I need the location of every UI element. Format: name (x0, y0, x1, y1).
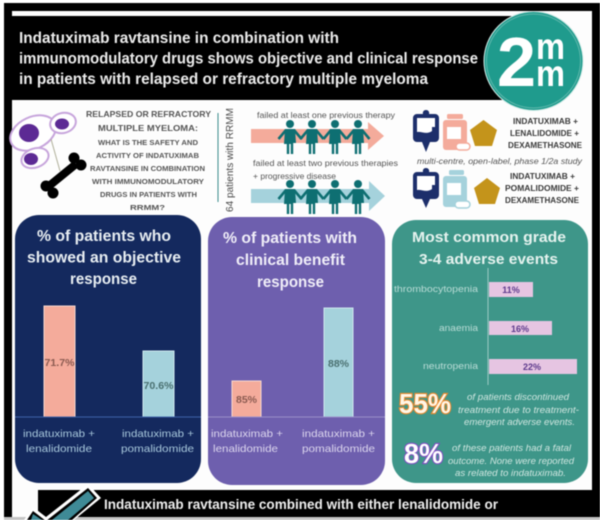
row: neutropenia 22%: 22% (523, 362, 541, 372)
drug combination 1 (508, 117, 583, 150)
stat text: fatal outcome: of these patients had a fatal (452, 443, 572, 453)
heading: objective response: response (70, 271, 137, 288)
stat text: fatal outcome: as related to indatuximab. (455, 468, 566, 478)
logo: 2 over m: m (536, 53, 565, 94)
bar: lenalidomide 71.7%: 71.7% (44, 358, 75, 369)
row: thrombocytopenia 11% (394, 282, 533, 297)
heading: objective response (27, 228, 181, 288)
drug combination 2: POMALIDOMIDE + (505, 184, 579, 193)
study design note: multi-centre, open-label, phase 1/2a study (417, 156, 583, 166)
question text: WHAT IS THE SAFETY AND (98, 138, 199, 147)
drug combination 1: INDATUXIMAB + (513, 117, 578, 126)
rotated label: 64 patients with RRMM: 64 patients with RRMM (225, 108, 236, 212)
conclusion text: Indatuximab ravtansine combined with either lenalidomide or (104, 496, 499, 512)
question text: WITH IMMUNOMODULATORY (92, 179, 204, 186)
axis labels: objective response: lenalidomide (26, 443, 92, 455)
logo: 2 over m: 2 (497, 23, 536, 101)
bar: lenalidomide 85%: 85% (236, 394, 258, 406)
baseline axis (15, 416, 385, 418)
label: first cohort: failed at least one previous therapy (257, 110, 396, 120)
question text: RAVTANSINE IN COMBINATION (90, 166, 205, 173)
bar: pomalidomide 88%: 88% (328, 358, 350, 370)
icon: first cohort patients (278, 120, 370, 154)
logo: 2 over m: m (536, 26, 565, 67)
header band (12, 16, 534, 100)
logo: 2 over m (484, 12, 583, 110)
bar: pomalidomide 88% (324, 308, 353, 417)
row: anaemia 16%: anaemia (439, 323, 478, 333)
icon: IV bag 1 (413, 110, 439, 152)
bar: lenalidomide 85% (232, 381, 261, 417)
axis labels: clinical benefit: pomalidomide (302, 443, 375, 455)
heading: adverse events: Most common grade (412, 229, 566, 246)
stat: 55%: 55% (399, 388, 451, 419)
axis labels: clinical benefit: lenalidomide (213, 443, 278, 455)
heading: objective response: showed an objective (27, 250, 181, 266)
drug combination 1: LENALIDOMIDE + (510, 129, 579, 138)
title: in patients with relapsed or refractory multiple myeloma (19, 71, 428, 88)
axis labels: objective response: pomalidomide (121, 443, 194, 455)
label: second cohort: failed at least two previous therapies (253, 158, 398, 168)
bar chart: adverse events (394, 268, 577, 385)
row: neutropenia 22% (423, 359, 577, 374)
heading: clinical benefit: response (257, 274, 324, 291)
icon: IV bag 2 (413, 168, 439, 208)
stat text: discontinued (458, 392, 579, 427)
icon: needle (51, 139, 60, 171)
divider line (217, 113, 219, 202)
panel: clinical benefit response (208, 217, 385, 485)
drug combination 2: INDATUXIMAB + (510, 172, 575, 181)
bar: lenalidomide 71.7% (44, 306, 75, 417)
heading: adverse events (412, 229, 566, 268)
label: second cohort: + progressive disease (253, 171, 336, 181)
row: anaemia 16%: 16% (511, 324, 529, 334)
panel: adverse events (392, 220, 588, 483)
title: Indatuximab ravtansine in combination with (19, 30, 339, 47)
arrow: first cohort (251, 122, 384, 150)
title (19, 30, 478, 88)
axis labels: objective response: indatuximab + (23, 428, 95, 440)
drug combination 2: DEXAMETHASONE (505, 196, 580, 205)
stat text: fatal outcome (448, 443, 575, 478)
icon: myeloma cells (4, 108, 78, 172)
question text: ACTIVITY OF INDATUXIMAB (96, 153, 199, 160)
icon: pentagon 1 (470, 120, 497, 146)
heading: objective response: % of patients who (37, 228, 171, 245)
bar: pomalidomide 70.6% (143, 351, 174, 417)
axis labels: clinical benefit: indatuximab + (211, 428, 283, 440)
question text: RRMM? (130, 203, 166, 212)
icon: pill bottle 1 (443, 114, 470, 150)
arrow: second cohort (251, 181, 385, 211)
heading: clinical benefit: % of patients with (223, 230, 357, 247)
drug combination 1: DEXAMETHASONE (508, 141, 583, 150)
heading: clinical benefit (223, 230, 357, 291)
icon: check mark (24, 484, 101, 520)
question text: RELAPSED OR REFRACTORY (86, 109, 211, 119)
axis labels: clinical benefit (211, 428, 375, 455)
row: anaemia 16% (439, 321, 552, 335)
panel: objective response (15, 215, 201, 483)
row: neutropenia 22%: neutropenia (423, 361, 478, 371)
stat: 8%: 8% (404, 438, 443, 469)
stat text: discontinued: treatment due to treatment- (458, 405, 579, 415)
label: second cohort (253, 158, 398, 181)
question text (86, 109, 211, 212)
stat text: fatal outcome: outcome. None were reported (448, 456, 575, 466)
icon: second cohort patients (278, 180, 370, 214)
heading: adverse events: 3-4 adverse events (419, 251, 558, 268)
icon: bone (40, 152, 86, 198)
row: thrombocytopenia 11%: thrombocytopenia (394, 284, 478, 294)
axis labels: objective response (23, 428, 194, 455)
icon: pentagon 2 (474, 178, 500, 204)
heading: clinical benefit: clinical benefit (236, 252, 345, 269)
question text: MULTIPLE MYELOMA: (98, 123, 198, 133)
icon: pill bottle 2 (443, 170, 470, 208)
bar: pomalidomide 70.6%: 70.6% (144, 381, 174, 392)
row: thrombocytopenia 11%: 11% (502, 285, 520, 295)
title: immunomodulatory drugs shows objective and clinical response (19, 50, 478, 68)
drug combination 2 (505, 172, 580, 205)
stat text: discontinued: of patients discontinued (467, 392, 570, 402)
question text: DRUGS IN PATIENTS WITH (100, 192, 197, 199)
axis labels: clinical benefit: indatuximab + (302, 428, 375, 440)
stat text: discontinued: emergent adverse events. (464, 417, 575, 427)
axis labels: objective response: indatuximab + (122, 428, 194, 440)
